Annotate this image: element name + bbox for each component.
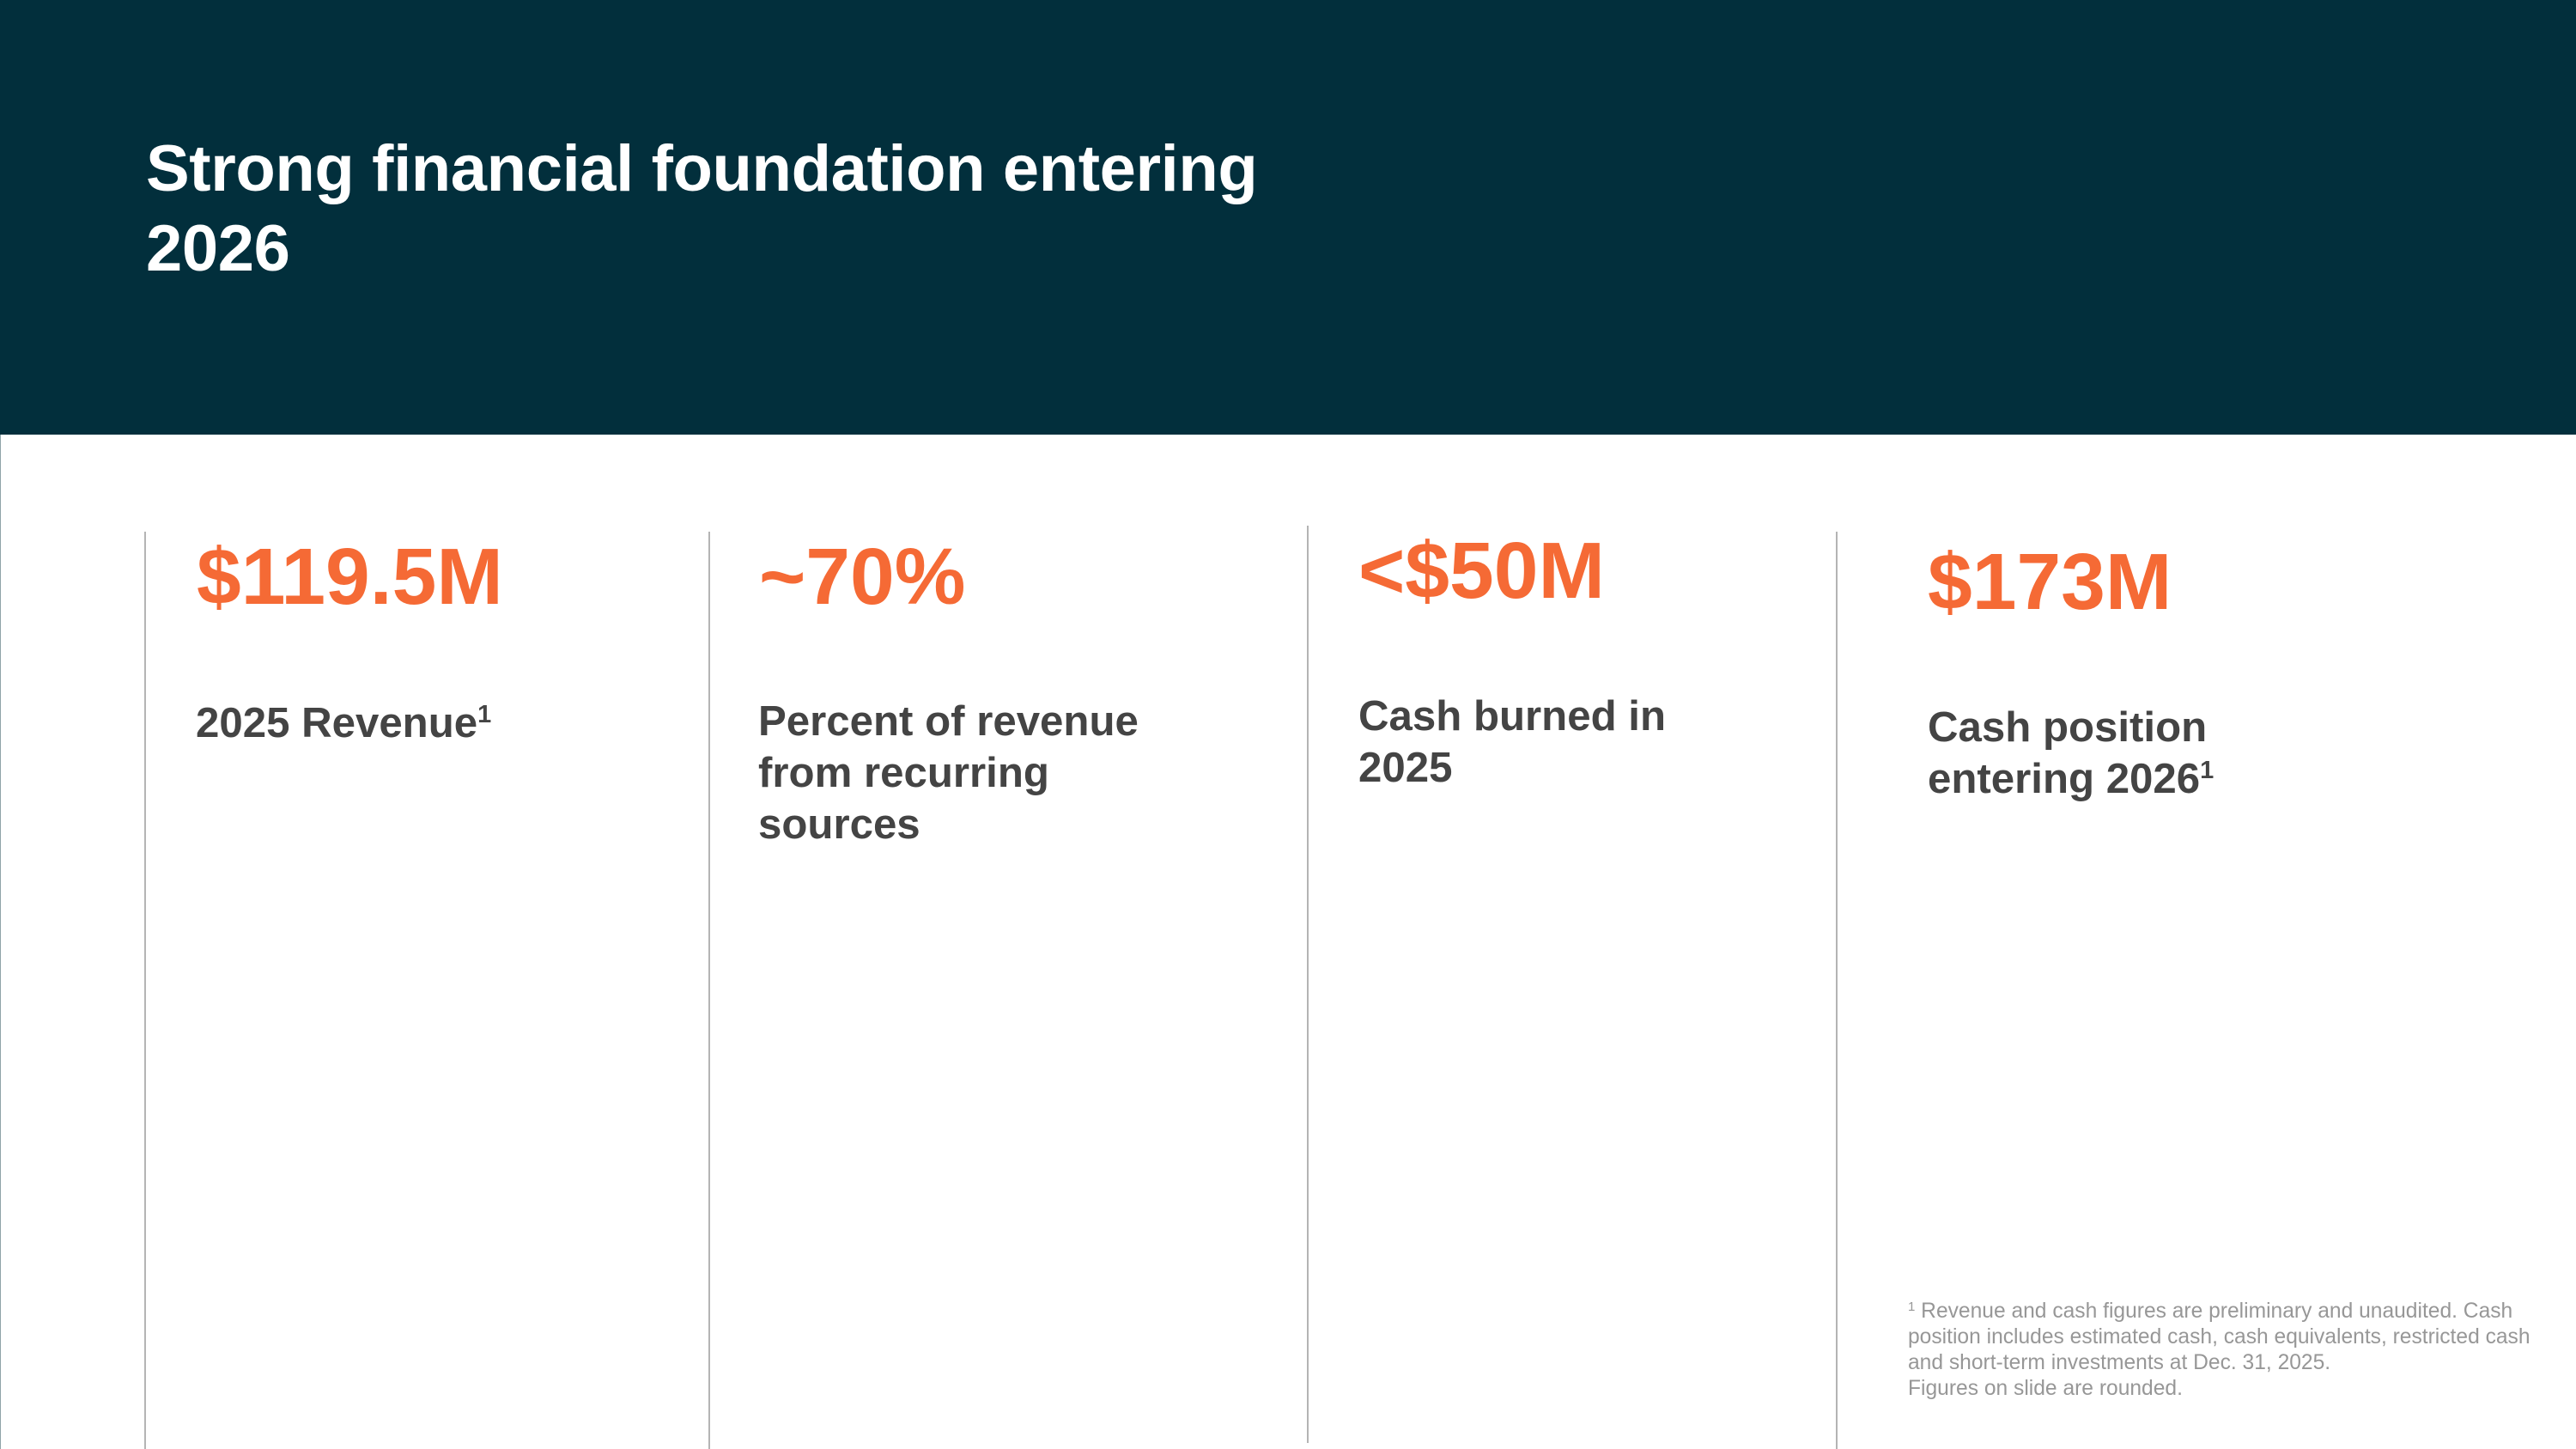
label: recurring percent: Percent of revenue bbox=[758, 697, 1139, 745]
title: Strong financial foundation entering bbox=[146, 132, 1257, 205]
panel: 2025 revenue bbox=[144, 532, 503, 1449]
label: cash position bbox=[1928, 703, 2214, 802]
label: recurring percent: from recurring bbox=[758, 749, 1049, 796]
footnote: Figures on slide are rounded. bbox=[1908, 1377, 2183, 1400]
title bbox=[146, 132, 1257, 285]
header band bbox=[0, 0, 2576, 435]
label: revenue: 2025 Revenue1 bbox=[196, 699, 491, 746]
label: recurring percent bbox=[758, 697, 1139, 848]
column divider bbox=[1307, 526, 1309, 1443]
label: cash position: entering 20261 bbox=[1928, 755, 2214, 802]
value: cash burned: <$50M bbox=[1358, 526, 1605, 615]
label: cash burned: 2025 bbox=[1358, 744, 1452, 791]
panel: cash position bbox=[1836, 532, 2214, 1449]
column divider bbox=[1836, 532, 1838, 1449]
footnote: position includes estimated cash, cash equivalents, restricted cash bbox=[1908, 1325, 2530, 1349]
footnote: 1 Revenue and cash figures are preliminary and unaudited. Cash bbox=[1908, 1300, 2512, 1323]
footnote bbox=[1908, 1300, 2530, 1400]
label: cash position: Cash position bbox=[1928, 703, 2207, 751]
panel: recurring revenue bbox=[708, 532, 1139, 1449]
left edge line bbox=[0, 435, 1, 1449]
panel: cash burned bbox=[1307, 526, 1666, 1443]
value: recurring percent: ~70% bbox=[759, 532, 965, 621]
column divider bbox=[144, 532, 146, 1449]
label: recurring percent: sources bbox=[758, 801, 920, 848]
title: 2026 bbox=[146, 212, 289, 285]
column divider bbox=[708, 532, 710, 1449]
label: cash burned bbox=[1358, 692, 1666, 791]
footnote: and short-term investments at Dec. 31, 2025. bbox=[1908, 1351, 2330, 1374]
label: cash burned: Cash burned in bbox=[1358, 692, 1666, 740]
value: revenue: $119.5M bbox=[197, 532, 503, 621]
value: cash position: $173M bbox=[1928, 537, 2172, 626]
